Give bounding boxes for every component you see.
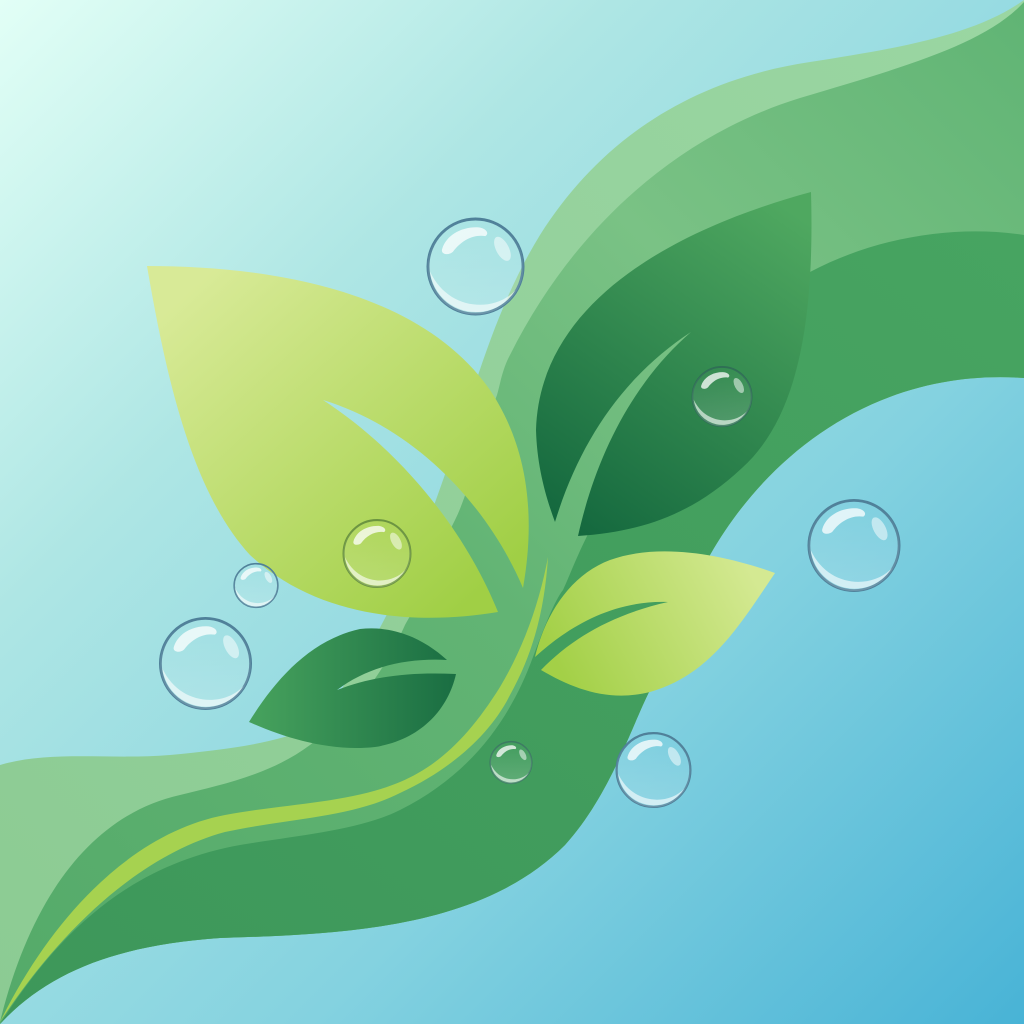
bubble: lime on light leaf	[343, 520, 411, 587]
bubble: small left	[234, 563, 278, 608]
bubble: small green	[490, 741, 532, 784]
bubble: lower left	[160, 618, 251, 709]
leaf: large lime	[147, 266, 529, 618]
wave: dark green front layer	[0, 231, 1024, 1024]
lime stripe	[0, 557, 548, 1022]
bubble: right	[808, 500, 900, 591]
leaf: small lime right	[535, 551, 775, 696]
bubble: bottom centre	[616, 733, 691, 807]
leaf: large dark green	[536, 192, 811, 536]
bubble: top centre	[427, 218, 524, 315]
bubble: green on dark leaf	[692, 367, 752, 426]
leaf: small dark left	[249, 628, 456, 748]
